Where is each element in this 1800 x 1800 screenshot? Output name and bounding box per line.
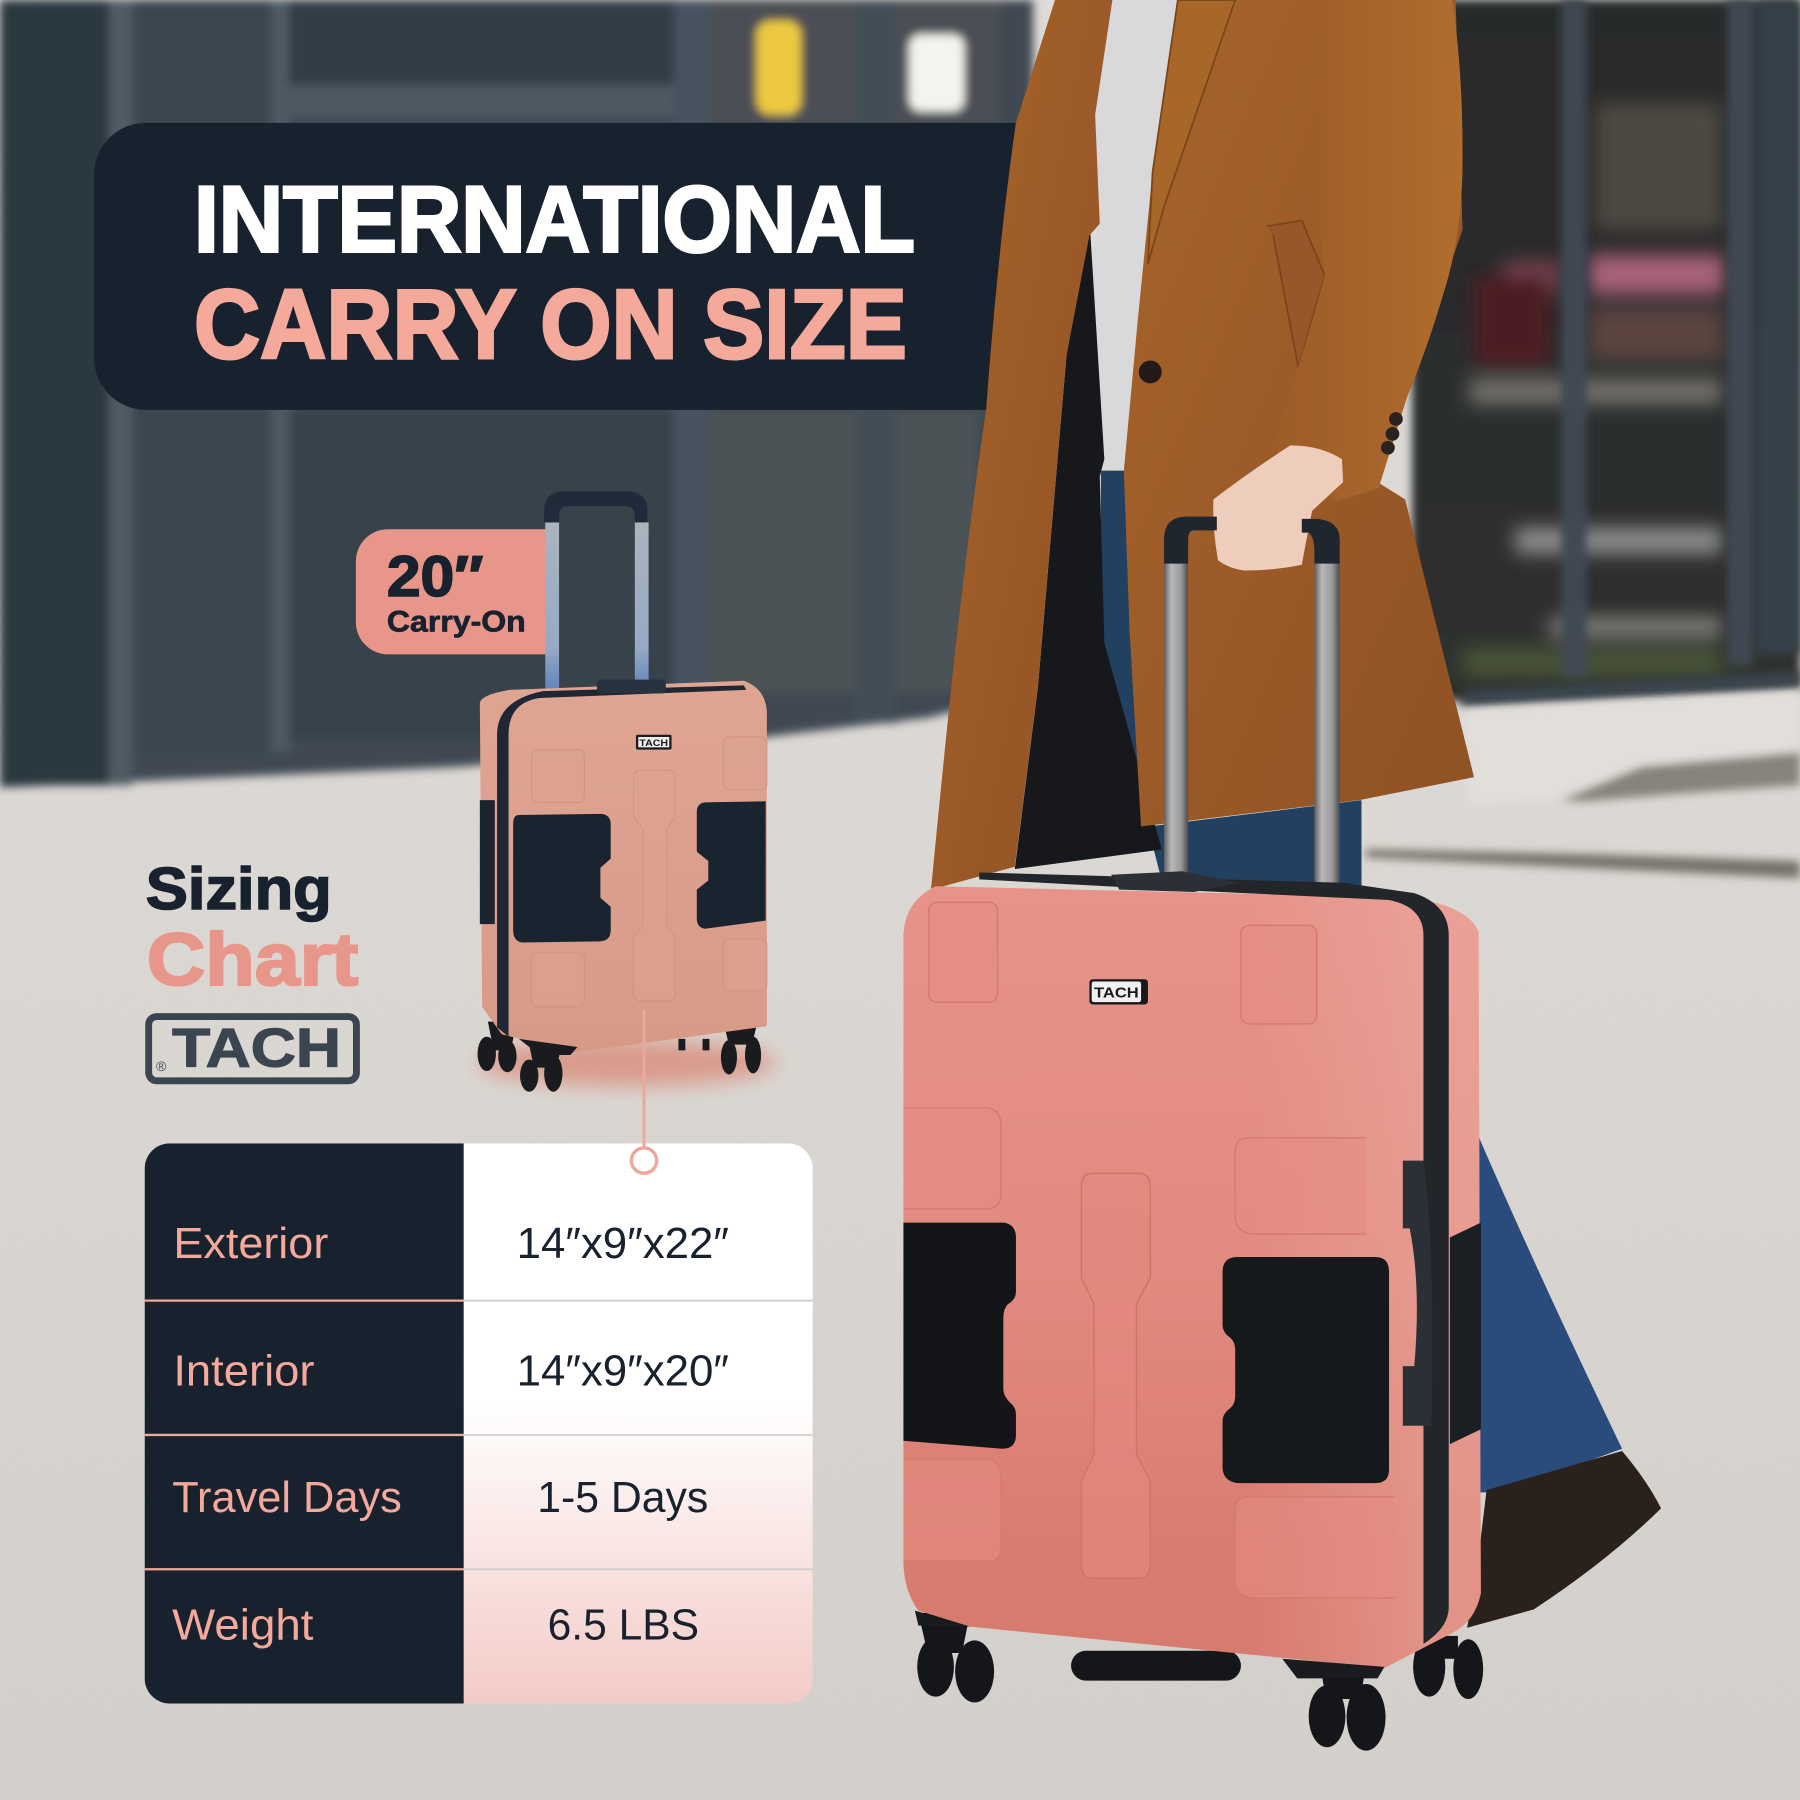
row: travel days: 1-5 Days (537, 1474, 708, 1522)
badge label text: Carry-On (387, 605, 526, 638)
heading: International: INTERNATIONAL (194, 166, 915, 271)
row: weight (172, 1601, 699, 1649)
shirt (1088, 0, 1178, 471)
wheels (478, 1022, 761, 1092)
shadow (478, 1040, 776, 1086)
black panel left (513, 814, 611, 942)
hand (1213, 445, 1343, 571)
row: weight: Weight (172, 1601, 313, 1649)
row: exterior: 14″x9″x22″ (517, 1220, 729, 1268)
row: travel days (172, 1474, 708, 1522)
size badge: 20 inch carry-on (356, 529, 546, 654)
small badge: TACH (639, 738, 668, 748)
side panel (480, 800, 495, 924)
person in brown coat (931, 0, 1661, 1628)
zipper (497, 685, 746, 1037)
badge: TACH: TACH (1094, 985, 1139, 1002)
row: interior: 14″x9″x20″ (517, 1348, 729, 1396)
TACH logo: TACH (172, 1016, 341, 1078)
lapel (1148, 0, 1235, 264)
row: exterior: Exterior (173, 1220, 328, 1268)
sleeve (1273, 0, 1463, 502)
row: interior: Interior (173, 1348, 315, 1396)
row: weight: 6.5 LBS (548, 1601, 699, 1649)
sizing chart heading (146, 855, 358, 1001)
zipper band (979, 872, 1449, 1644)
coat left panel (931, 0, 1112, 890)
row: exterior (173, 1220, 729, 1268)
side handle (1403, 1161, 1432, 1426)
sizing table (145, 1143, 813, 1704)
lower leg (1475, 1136, 1622, 1492)
TACH logo (149, 1016, 356, 1081)
wheels and forks (917, 1613, 1483, 1751)
heading: Carry On Size: CARRY ON SIZE (194, 269, 907, 379)
side plate (1450, 1223, 1481, 1444)
heading: Chart: Chart (147, 917, 358, 1001)
row: travel days: Travel Days (172, 1474, 402, 1522)
zipper pull (1111, 871, 1240, 892)
shoe (1467, 1451, 1661, 1628)
centre bone recess (1081, 1173, 1150, 1578)
coat right panel (1124, 0, 1474, 827)
bottom bumpers (915, 1611, 1384, 1678)
badge: TACH (1089, 979, 1148, 1004)
small suitcase (478, 491, 776, 1092)
black connector panel left (903, 1223, 1016, 1449)
corner and side recesses (903, 902, 1395, 1598)
row: interior (173, 1348, 729, 1396)
coat lining (1015, 218, 1162, 869)
cuff buttons (1381, 412, 1403, 455)
black panel right (697, 801, 766, 929)
TACH logo: ® (156, 1059, 166, 1074)
badge size text: 20″ (387, 545, 483, 609)
connector line from suitcase to table (631, 1010, 657, 1173)
coat button (1139, 360, 1162, 383)
telescopic handle (1164, 517, 1340, 884)
handle (544, 491, 649, 690)
large suitcase (903, 517, 1483, 1751)
pocket (1267, 220, 1325, 367)
small badge (636, 735, 672, 750)
bumper (519, 1039, 577, 1055)
shell (480, 681, 767, 1053)
title banner (94, 123, 1033, 410)
recesses (532, 737, 767, 1007)
black connector panel right (1223, 1257, 1389, 1483)
shell (903, 886, 1481, 1668)
jeans upper (1101, 471, 1361, 890)
heading: Sizing: Sizing (146, 855, 332, 922)
